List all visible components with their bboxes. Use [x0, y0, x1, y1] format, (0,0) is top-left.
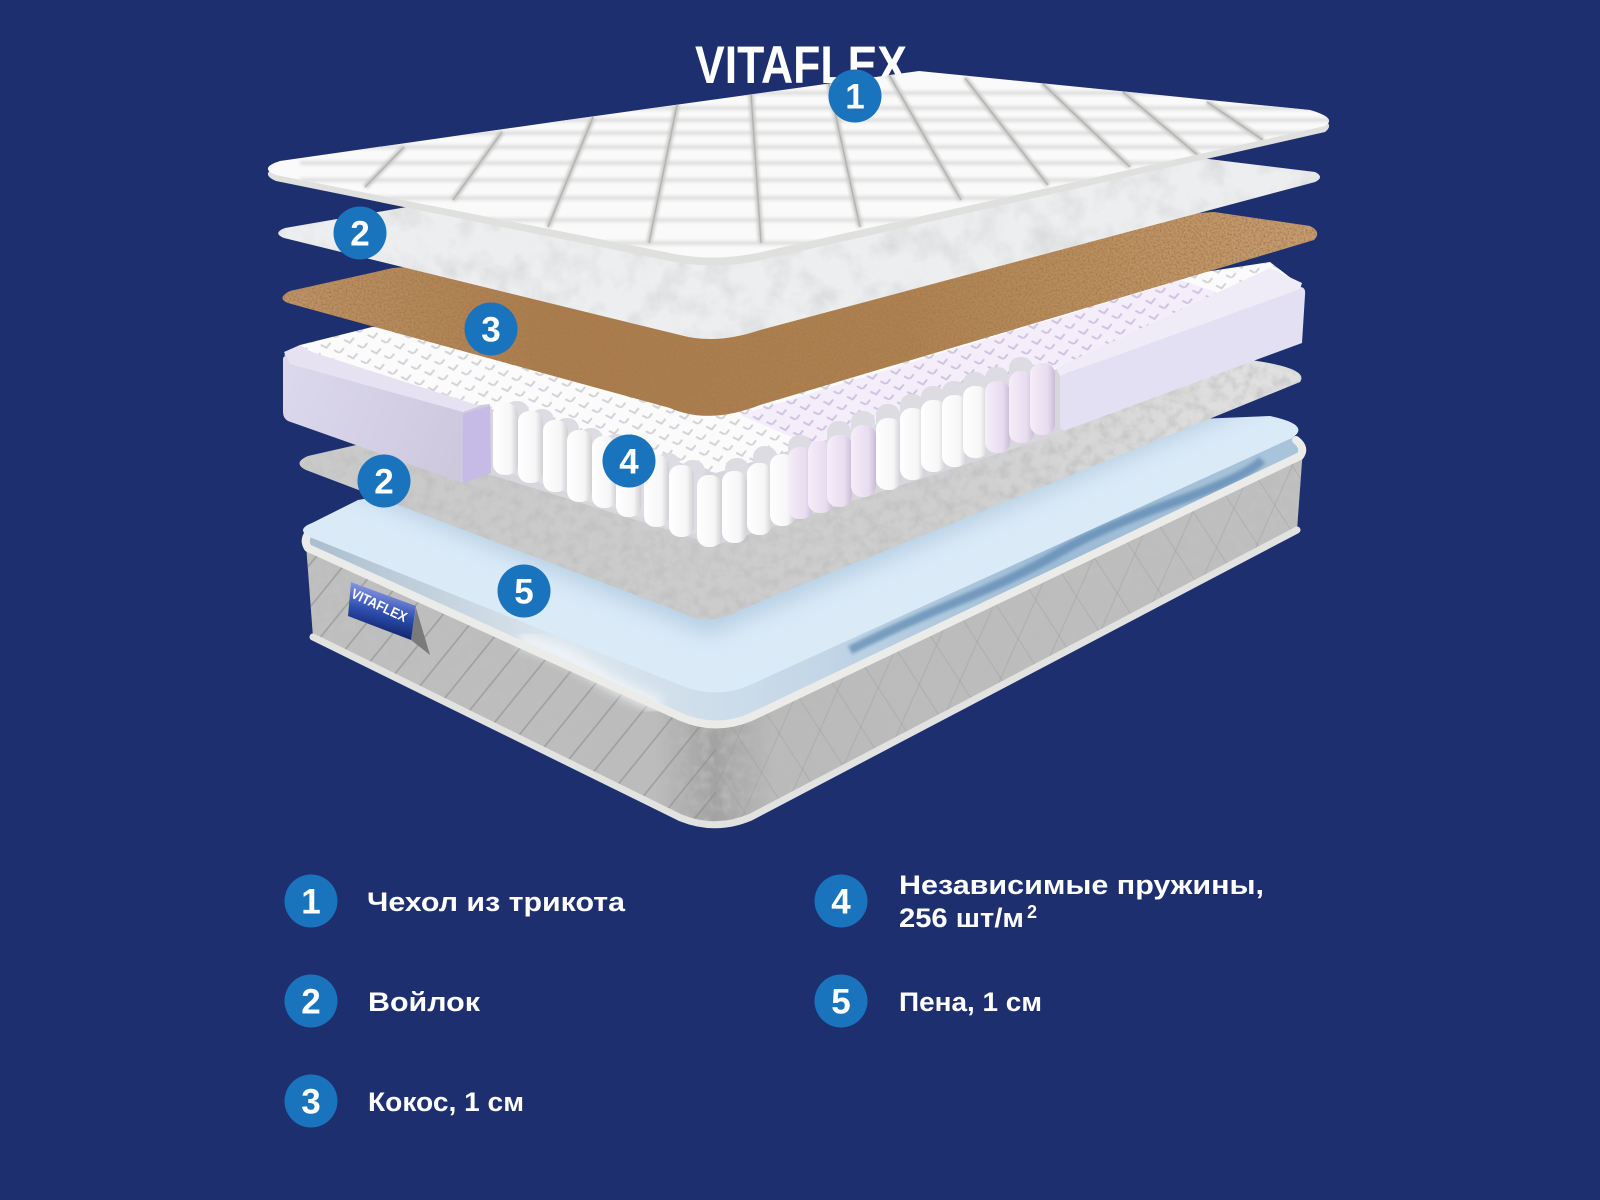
legend item 5: [814, 974, 1042, 1028]
legend: [284, 870, 1264, 1128]
spring tops: [284, 262, 1300, 473]
legend item 2: [284, 974, 481, 1028]
legend item 5: Пена, 1 см: [899, 987, 1042, 1017]
legend item 4: 2: [1027, 902, 1037, 922]
badge 2 on lower felt: 2: [374, 462, 394, 502]
legend item 4: 4: [831, 882, 851, 922]
badge 1 on cover: 1: [845, 78, 865, 116]
legend item 2: Войлок: [368, 987, 481, 1017]
layer 5: blue foam: [303, 416, 1298, 692]
legend item 1: 1: [301, 882, 321, 922]
legend item 5: 5: [831, 982, 851, 1022]
badge 2 on upper felt: [334, 206, 386, 260]
mattress bottom piping: [313, 530, 1297, 825]
base mattress: [306, 437, 1303, 827]
layer 2: lower felt: [299, 360, 1301, 620]
left foam block: [283, 345, 491, 483]
cover edge: [268, 76, 1329, 266]
spring columns: back row: [505, 357, 1033, 534]
mattress right side: [716, 448, 1303, 827]
brand tag: VITAFLEX: [349, 585, 410, 625]
legend item 1: [284, 874, 626, 928]
quilting seams: [300, 73, 1340, 243]
logo: VITAFLEX: VITAFLEX: [695, 36, 907, 95]
legend item 3: [284, 1074, 524, 1128]
badge 3 on coconut: [464, 302, 518, 356]
legend item 4: 256 шт/м: [899, 903, 1024, 933]
legend item 1: Чехол из трикота: [367, 887, 626, 917]
brand tag: [348, 582, 430, 655]
badge 2 on lower felt: [358, 454, 410, 508]
legend item 4: [814, 870, 1264, 933]
layer 1: quilted knit cover: [268, 71, 1340, 266]
badge 4 on springs: 4: [619, 442, 639, 482]
badge 1 on cover: [828, 70, 882, 122]
cover top: [268, 71, 1329, 258]
mattress left side: [306, 544, 716, 827]
legend item 3: Кокос, 1 см: [368, 1087, 524, 1117]
badge 5 on foam: 5: [514, 572, 534, 612]
layer 2: upper felt: [278, 158, 1320, 339]
mattress top inner surface: [306, 437, 1303, 725]
spring columns: front row: [493, 363, 1055, 547]
spring face backing: [480, 360, 1066, 545]
mattress top piping: [306, 440, 1302, 724]
legend item 3: 3: [301, 1082, 321, 1122]
right foam block: [1056, 268, 1305, 430]
badge 2 on upper felt: 2: [350, 214, 370, 254]
badge 5 on foam: [498, 564, 550, 618]
legend item 2: 2: [301, 982, 321, 1022]
layer 3: coconut sheet: [282, 212, 1317, 416]
legend item 4: Независимые пружины,: [899, 870, 1264, 900]
badge 3 on coconut: 3: [481, 310, 501, 350]
badge 4 on springs: [602, 434, 656, 488]
layer 4: independent springs block: [283, 262, 1305, 547]
